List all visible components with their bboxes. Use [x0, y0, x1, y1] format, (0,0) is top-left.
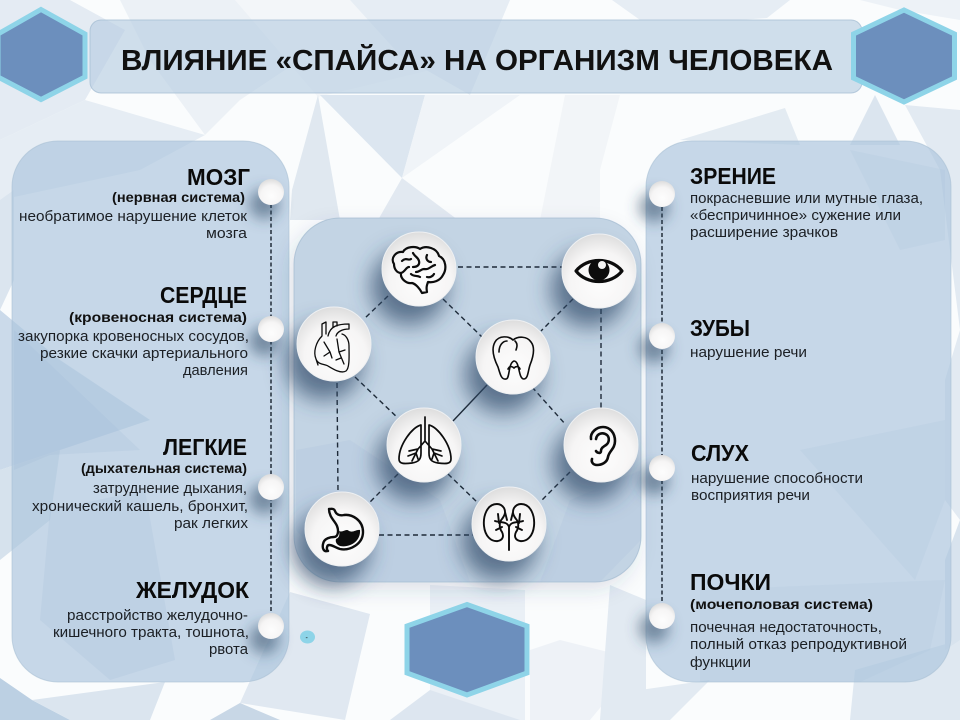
panel: left column — [12, 141, 289, 682]
icon: lungs — [376, 408, 461, 501]
text block: stomach: рвота — [209, 642, 249, 658]
text block: stomach: ЖЕЛУДОК — [135, 577, 250, 603]
text block: teeth: нарушение речи — [690, 345, 807, 361]
text block: kidneys: ПОЧКИ — [690, 569, 771, 595]
connectors between organ circles — [337, 267, 601, 535]
small teal dot — [300, 630, 315, 644]
text block: brain: МОЗГ — [187, 164, 250, 190]
text block: vision: «беспричинное» сужение или — [690, 208, 901, 224]
text block: vision — [690, 163, 923, 241]
text block: teeth: ЗУБЫ — [690, 315, 750, 341]
text block: lungs: (дыхательная система) — [81, 460, 247, 476]
panel: right column — [646, 141, 951, 682]
text block: lungs: рак легких — [174, 516, 249, 532]
text block: heart — [18, 282, 249, 379]
text block: vision: ЗРЕНИЕ — [690, 163, 776, 189]
text block: kidneys: функции — [690, 655, 751, 671]
icon: heart — [286, 307, 371, 400]
text block: stomach — [53, 577, 250, 658]
text block: vision: расширение зрачков — [690, 225, 838, 241]
text block: hearing: СЛУХ — [691, 440, 750, 466]
text block: heart: давления — [183, 363, 248, 379]
text block: hearing: восприятия речи — [691, 488, 810, 504]
text block: heart: СЕРДЦЕ — [160, 282, 247, 308]
icon: kidneys — [461, 487, 546, 580]
text block: brain: мозга — [206, 226, 248, 242]
text block: hearing — [691, 440, 863, 504]
text block: kidneys — [690, 569, 907, 671]
text block: brain — [19, 164, 250, 242]
text block: brain: (нервная система) — [112, 189, 245, 205]
text block: lungs: ЛЕГКИЕ — [163, 434, 247, 460]
icon: eye — [551, 234, 636, 327]
panel: title — [90, 20, 862, 93]
text block: kidneys: полный отказ репродуктивной — [690, 637, 907, 653]
text block: heart: (кровеносная система) — [69, 309, 247, 325]
hexagon: top right — [854, 10, 954, 102]
left timeline with markers — [249, 179, 284, 654]
text block: lungs — [32, 434, 249, 532]
text block: hearing: нарушение способности — [691, 471, 863, 487]
text block: vision: покрасневшие или мутные глаза, — [690, 191, 923, 207]
icon: ear — [553, 408, 638, 501]
text block: heart: резкие скачки артериального — [40, 346, 248, 362]
title: ВЛИЯНИЕ «СПАЙСА» НА ОРГАНИЗМ ЧЕЛОВЕКА — [121, 43, 833, 77]
hexagon: top left — [0, 10, 85, 100]
text block: stomach: расстройство желудочно- — [67, 608, 248, 624]
text block: lungs: хронический кашель, бронхит, — [32, 499, 248, 515]
icon: tooth — [465, 320, 550, 413]
right timeline with markers — [639, 181, 675, 643]
icon: stomach — [294, 492, 379, 585]
text block: brain: необратимое нарушение клеток — [19, 209, 248, 225]
text block: heart: закупорка кровеносных сосудов, — [18, 329, 249, 345]
small teal dot: - — [306, 635, 308, 642]
text block: lungs: затруднение дыхания, — [93, 481, 247, 497]
text block: stomach: кишечного тракта, тошнота, — [53, 625, 249, 641]
text block: kidneys: почечная недостаточность, — [690, 620, 882, 636]
text block: kidneys: (мочеполовая система) — [690, 596, 873, 612]
hexagon: bottom centre — [407, 604, 527, 695]
panel: centre network — [289, 218, 641, 590]
icon: brain — [371, 232, 456, 325]
text block: teeth — [690, 315, 807, 361]
